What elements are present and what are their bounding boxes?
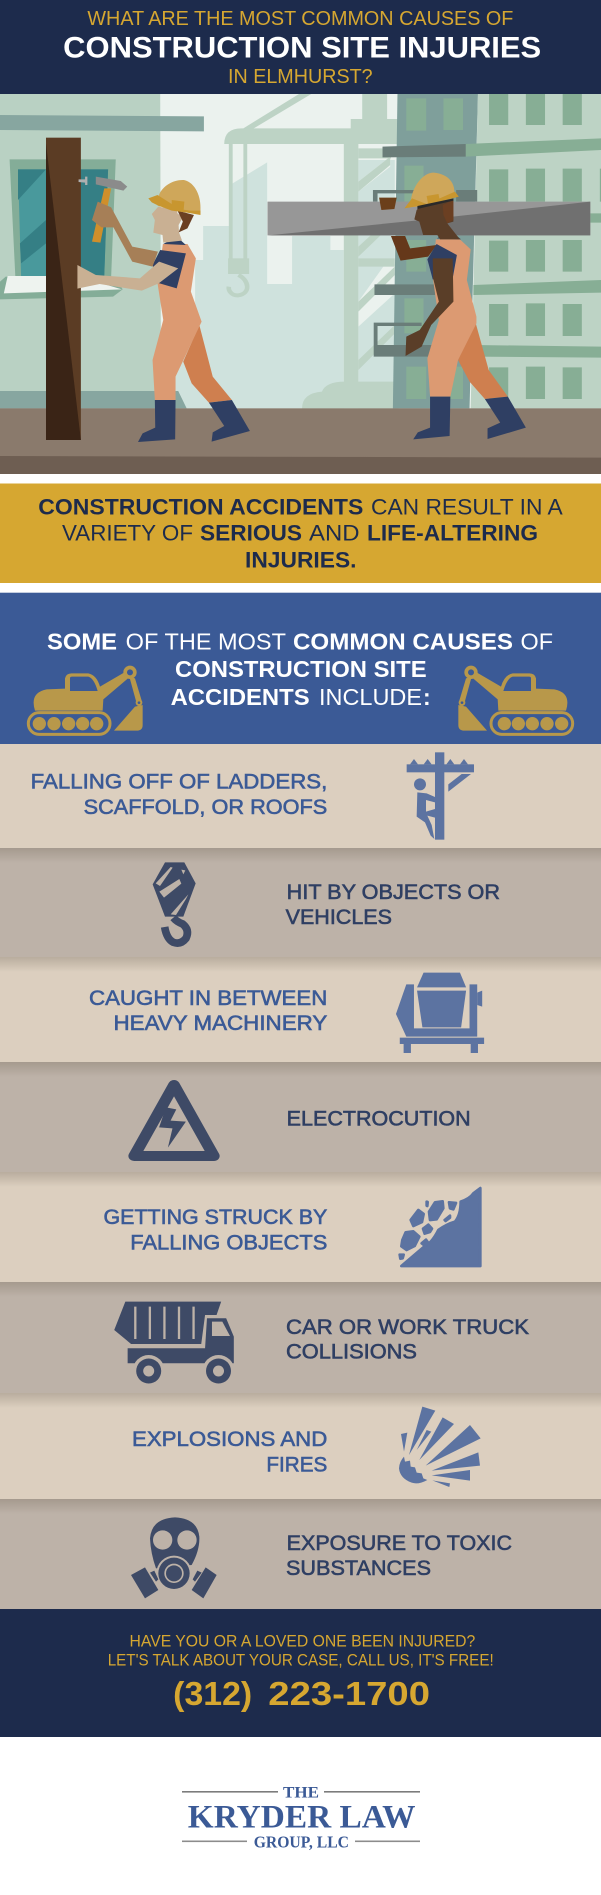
intro heading: INCLUDE [319, 684, 422, 710]
icon: left excavator [28, 666, 143, 734]
icon: worker climbing utility pole [407, 752, 474, 840]
panel: toxic substances: SUBSTANCES [286, 1557, 431, 1580]
panel: explosions and fires: EXPLOSIONS AND [132, 1428, 327, 1451]
panel: falling off ladders [0, 744, 601, 848]
panel: falling off ladders: FALLING OFF OF LADDERS, [31, 770, 327, 793]
panel: falling off ladders: SCAFFOLD, OR ROOFS [84, 796, 327, 819]
panel: electrocution: ELECTROCUTION [287, 1108, 471, 1131]
intro heading [47, 628, 553, 710]
icon: crane hook [153, 862, 196, 943]
header banner: WHAT ARE THE MOST COMMON CAUSES OF [87, 7, 513, 30]
right tower [393, 94, 478, 408]
icon: right excavator [458, 666, 573, 734]
intro heading: OF [520, 628, 553, 654]
call to action [0, 1609, 601, 1737]
steel beam [268, 202, 590, 235]
panel: caught in machinery: HEAVY MACHINERY [114, 1012, 327, 1035]
icon: rockslide [400, 1188, 480, 1266]
panel: falling objects: FALLING OBJECTS [130, 1231, 327, 1254]
icon: gas mask [131, 1517, 217, 1598]
panel: falling objects [0, 1172, 601, 1282]
crane [224, 94, 399, 408]
panel: toxic substances [0, 1499, 601, 1609]
panel: truck collisions [0, 1282, 601, 1393]
window [0, 159, 123, 299]
icon: dump truck [114, 1302, 234, 1387]
gold statement band: INJURIES. [245, 548, 356, 573]
panel: hit by objects: HIT BY OBJECTS OR [287, 881, 500, 904]
panel: hit by objects [0, 848, 601, 957]
icon: explosion [399, 1407, 481, 1487]
header banner: CONSTRUCTION SITE INJURIES [63, 31, 541, 64]
header banner [0, 0, 601, 94]
gold statement band: VARIETY OF [62, 521, 193, 546]
intro heading: OF THE MOST [126, 628, 286, 654]
worker two [379, 173, 526, 439]
gold statement band: CAN RESULT IN A [371, 494, 563, 519]
intro heading: : [423, 684, 431, 710]
scaffold platforms [373, 144, 477, 357]
panel: falling objects: GETTING STRUCK BY [104, 1206, 327, 1229]
icon: cement mixer [396, 973, 484, 1053]
illustration: two construction workers [0, 94, 601, 474]
icon: high voltage warning [134, 1085, 214, 1156]
panel: caught in machinery: CAUGHT IN BETWEEN [89, 987, 327, 1010]
worker one [77, 177, 250, 442]
logo: The Kryder Law Group: THE [283, 1784, 319, 1801]
wooden post [46, 138, 81, 440]
panel: toxic substances: EXPOSURE TO TOXIC [287, 1532, 512, 1555]
header banner: IN ELMHURST? [228, 65, 373, 88]
logo: The Kryder Law Group: KRYDER LAW [188, 1799, 416, 1835]
panel: explosions and fires: FIRES [266, 1453, 327, 1476]
logo: The Kryder Law Group: GROUP, LLC [254, 1832, 349, 1851]
intro heading: COMMON CAUSES [293, 628, 513, 654]
logo: The Kryder Law Group [182, 1784, 420, 1851]
panel: truck collisions: COLLISIONS [286, 1341, 417, 1364]
blue intro panel [0, 593, 601, 744]
panel: hit by objects: VEHICLES [286, 906, 392, 929]
gold statement band: CONSTRUCTION ACCIDENTS [38, 494, 363, 519]
left building [0, 94, 161, 408]
right building [471, 94, 601, 408]
panel: truck collisions: CAR OR WORK TRUCK [286, 1316, 529, 1339]
intro heading: CONSTRUCTION SITE [175, 656, 427, 682]
gold statement band [0, 484, 601, 583]
call to action: LET'S TALK ABOUT YOUR CASE, CALL US, IT'S FREE! [108, 1651, 494, 1670]
call to action: (312) [173, 1675, 252, 1712]
panel: electrocution [0, 1062, 601, 1172]
intro heading: ACCIDENTS [171, 684, 310, 710]
gold statement band: AND [309, 521, 360, 546]
intro heading: SOME [47, 628, 117, 654]
hazy city background [161, 162, 344, 408]
panel: caught in machinery [0, 957, 601, 1062]
ground [0, 408, 601, 474]
call to action: HAVE YOU OR A LOVED ONE BEEN INJURED? [130, 1632, 475, 1651]
call to action: 223-1700 [268, 1675, 430, 1712]
panel: explosions and fires [0, 1393, 601, 1499]
gold statement band: SERIOUS [200, 521, 302, 546]
gold statement band: LIFE-ALTERING [367, 521, 538, 546]
